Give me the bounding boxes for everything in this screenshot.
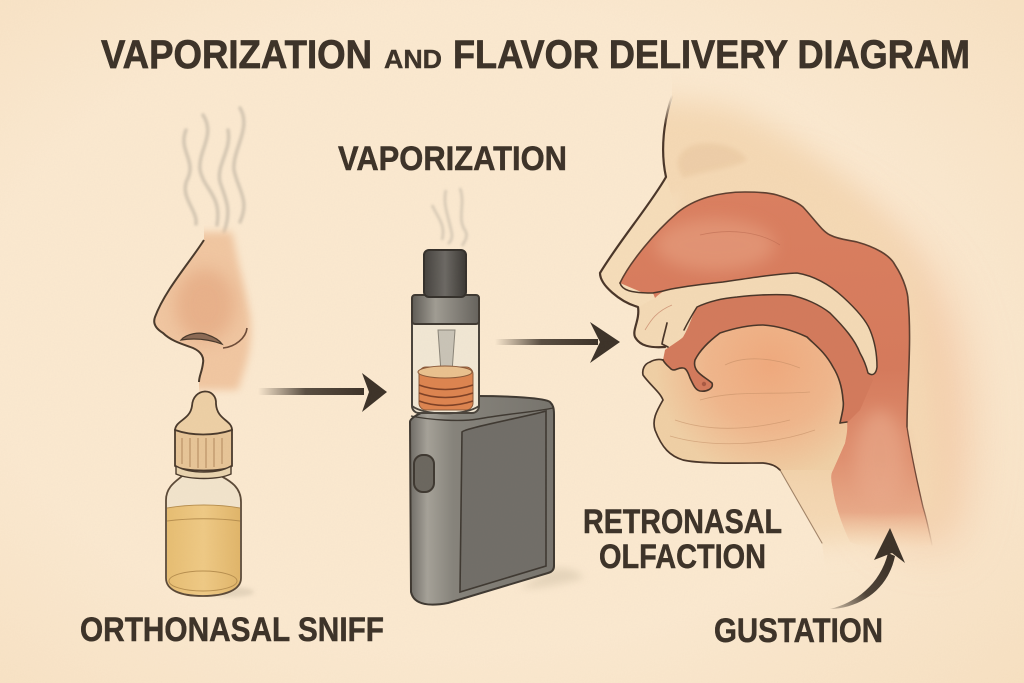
- brow bump: [678, 143, 747, 178]
- arrow: device to mouth: [495, 322, 620, 363]
- palate band: [634, 273, 877, 375]
- icon: device vapor wisps: [432, 188, 467, 246]
- skin of face: [621, 93, 934, 548]
- icon: nose: [140, 232, 251, 390]
- title: AND: [384, 44, 442, 74]
- title: [101, 33, 970, 77]
- jaw and tongue body: [643, 325, 847, 470]
- label: retronasal olfaction: RETRONASAL: [583, 503, 782, 541]
- throat shading: [855, 410, 905, 510]
- tank glass: [412, 300, 479, 413]
- neck: [780, 470, 850, 545]
- icon: vape device: [410, 250, 584, 605]
- coil: [418, 366, 473, 410]
- airway: [620, 192, 932, 550]
- label: retronasal olfaction: [583, 503, 782, 576]
- device body: [410, 396, 554, 605]
- label: retronasal olfaction: OLFACTION: [599, 538, 766, 576]
- arrow: sniff to device: [258, 373, 387, 412]
- tank collar: [412, 295, 479, 324]
- arrow: gustation curve: [830, 528, 905, 609]
- device front panel: [460, 411, 546, 592]
- title: VAPORIZATION: [101, 33, 372, 77]
- drip tip: [424, 250, 466, 297]
- anatomical head cross-section: [598, 93, 934, 548]
- icon: aroma wisps above nose: [184, 108, 244, 232]
- label: orthonasal sniff: ORTHONASAL SNIFF: [80, 611, 384, 649]
- icon: e-liquid dropper bottle: [166, 391, 254, 597]
- nose margin: [600, 177, 677, 307]
- outlines: [600, 96, 932, 545]
- nasal cavity shading: [655, 219, 775, 271]
- title: FLAVOR DELIVERY DIAGRAM: [453, 33, 970, 77]
- label: vaporization: VAPORIZATION: [338, 140, 567, 178]
- device button: [414, 455, 434, 492]
- center post: [438, 330, 455, 372]
- tongue texture: [645, 232, 815, 444]
- tongue tip dot: [702, 382, 706, 386]
- head soft shading: [760, 170, 968, 546]
- tongue band: [663, 295, 873, 425]
- label: gustation: GUSTATION: [714, 612, 883, 650]
